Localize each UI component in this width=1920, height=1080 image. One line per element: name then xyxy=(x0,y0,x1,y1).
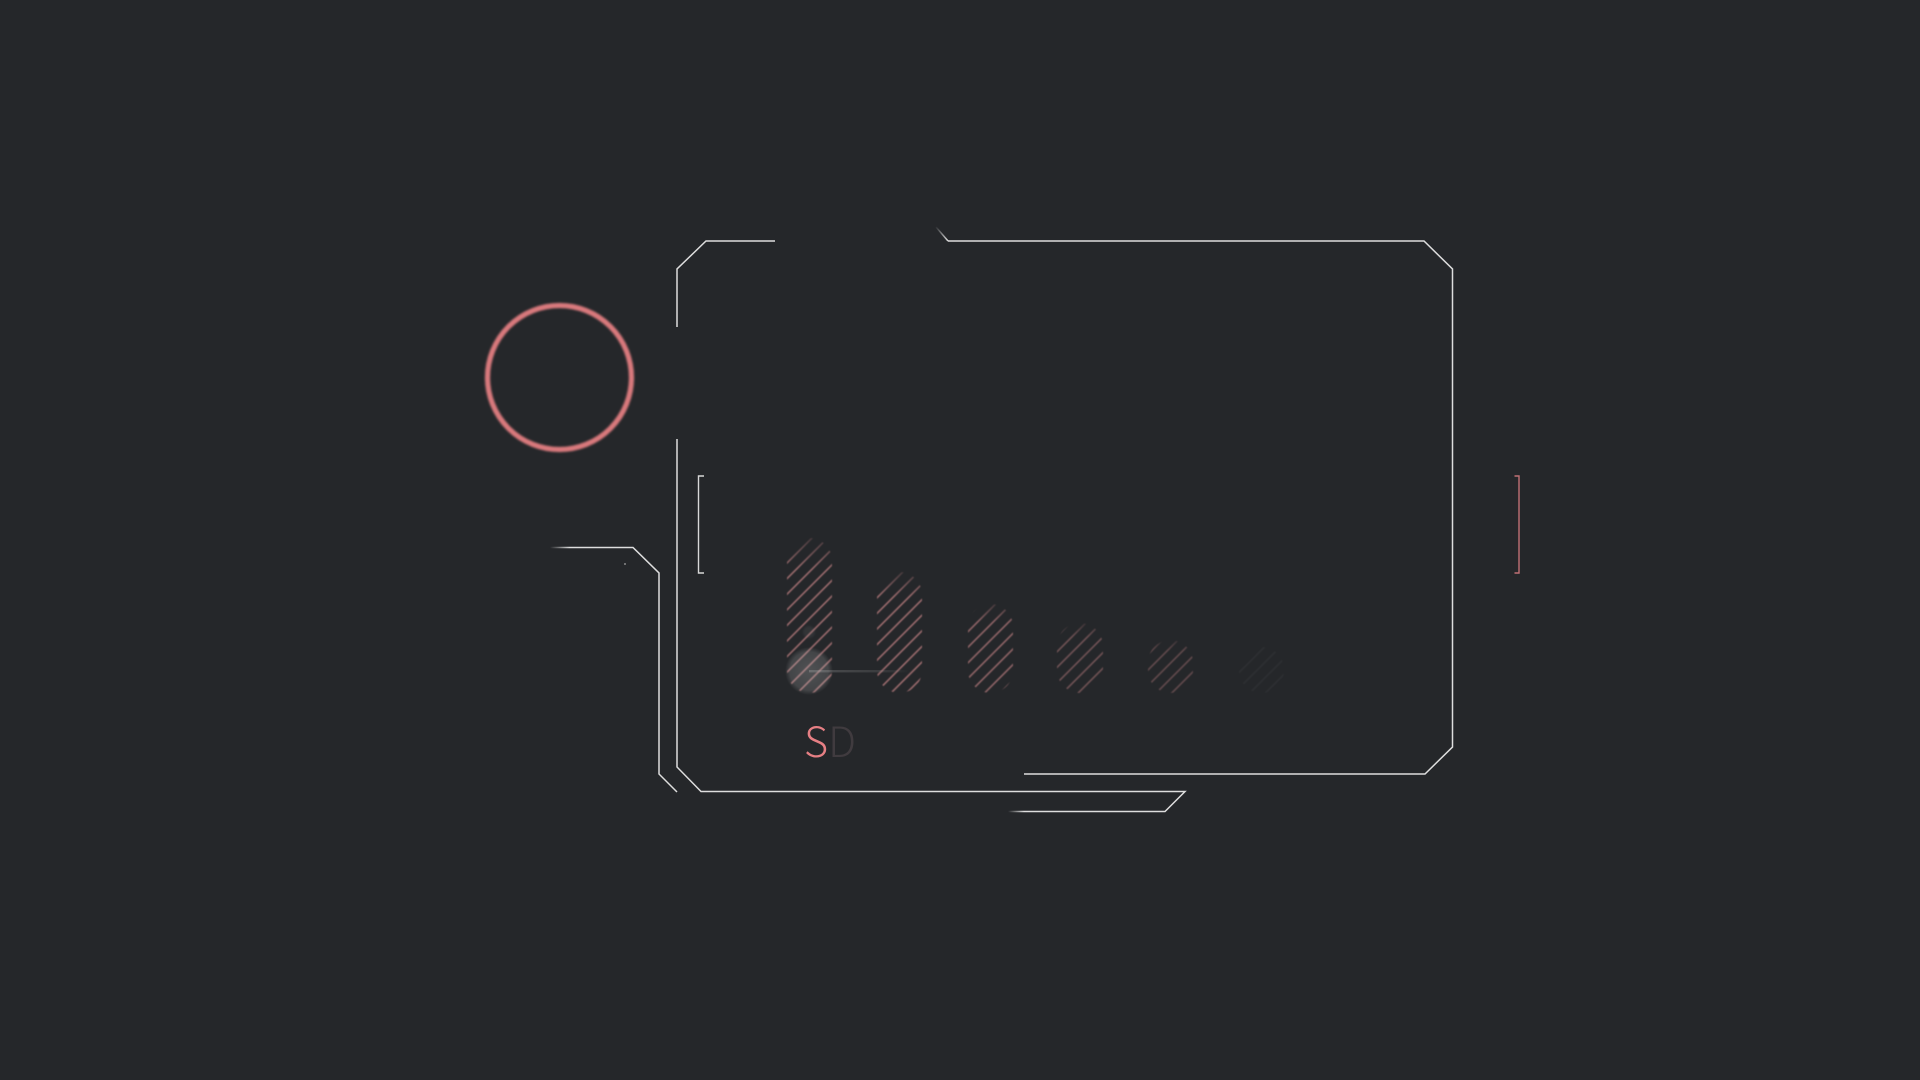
bar 5 xyxy=(1148,640,1193,693)
label: SD: SD xyxy=(804,709,856,769)
small faint marker above glow xyxy=(803,626,815,638)
frame: lower-left and bottom edge line xyxy=(677,439,1185,812)
connector line from glow marker xyxy=(809,670,910,672)
bar 2 xyxy=(877,572,922,693)
left bracket xyxy=(698,476,704,573)
small dot xyxy=(624,563,626,565)
outer bracket line on the left xyxy=(570,548,677,792)
frame: top-left corner line xyxy=(677,241,775,327)
right bracket xyxy=(1514,476,1519,573)
frame: top-right and right edge line xyxy=(948,241,1452,774)
frame: faded tail of bottom line xyxy=(1008,810,1024,812)
bar 4 xyxy=(1057,623,1103,693)
bar chart: hatched pills xyxy=(786,538,1194,694)
icon: pink ring xyxy=(488,306,632,450)
bar 1 xyxy=(787,538,832,693)
glow marker xyxy=(785,647,833,695)
faded tail of outer bracket line xyxy=(550,546,570,548)
bar 6 xyxy=(1239,647,1284,693)
frame: faded stub at top xyxy=(936,227,948,241)
bar 3 xyxy=(968,604,1013,693)
